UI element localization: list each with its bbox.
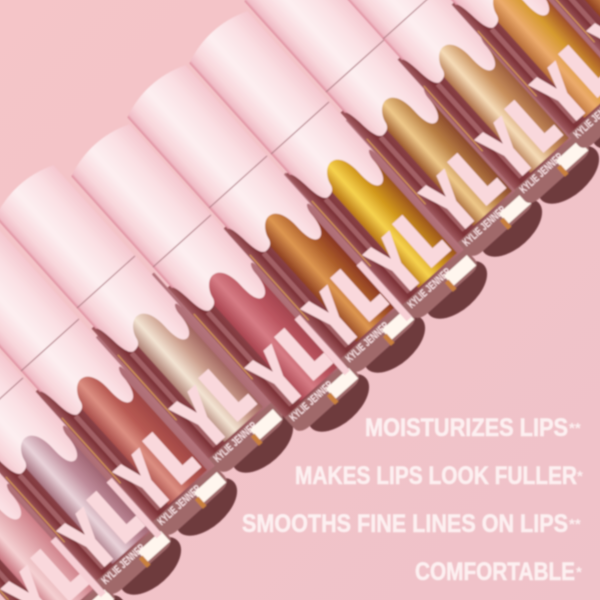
tube: tan copper gloss: KYLIE JENNER: [518, 151, 566, 196]
tube: bronze glitter gloss: [237, 0, 552, 276]
tube: gold gloss: KYLIE JENNER: [406, 266, 454, 311]
benefit: moisturizes lips: **: [569, 420, 581, 437]
tube: rose gloss: [64, 114, 379, 451]
tube: bronze glitter gloss: KYLIE JENNER: [461, 204, 509, 249]
tube: far right, cropped: [406, 0, 600, 114]
tube: copper gloss: [114, 55, 435, 398]
tube: beige gloss: [0, 155, 303, 492]
tube: rose gloss: KYLIE JENNER: [288, 379, 336, 424]
benefit: smooths fine lines on lips: **: [569, 516, 581, 533]
tube: tan copper gloss: [294, 0, 600, 223]
benefit: moisturizes lips: MOISTURIZES LIPS: [365, 414, 568, 442]
tube: gold gloss: [176, 1, 497, 344]
tube: beige gloss: KYLIE JENNER: [212, 420, 260, 465]
benefit: makes lips look fuller: *: [577, 468, 583, 485]
tube: mauve gloss: [0, 277, 191, 600]
tube: orange gold gloss: [348, 0, 600, 168]
tube: coral gloss: [0, 218, 247, 561]
benefits list: [242, 414, 583, 586]
tube: coral gloss: KYLIE JENNER: [156, 483, 204, 528]
benefit: comfortable: *: [576, 564, 582, 581]
tube: copper gloss: KYLIE JENNER: [344, 320, 392, 365]
tube: mauve gloss: KYLIE JENNER: [100, 542, 148, 587]
tube: pink gloss, bottom left: [0, 335, 135, 600]
